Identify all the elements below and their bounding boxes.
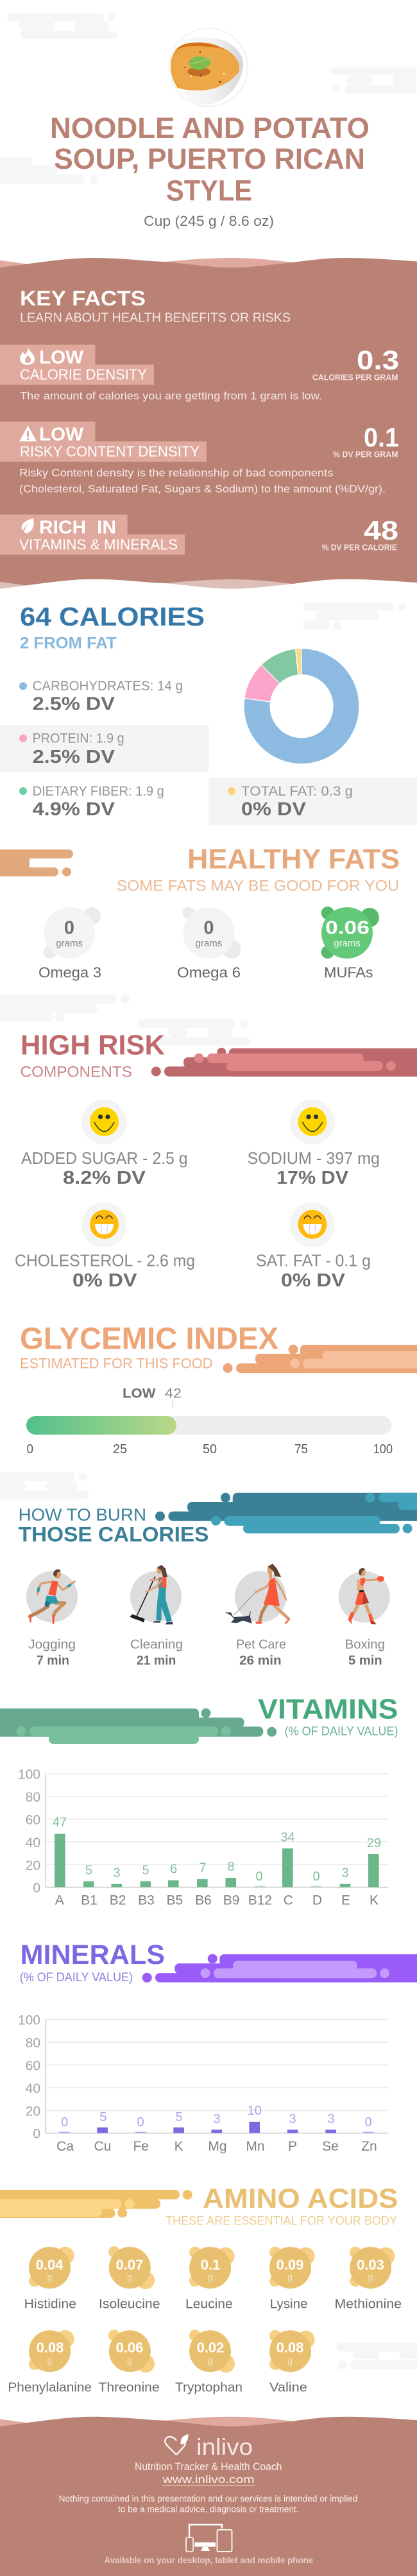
bar chart: vitamins: B12	[248, 1893, 272, 1907]
legend: total fat: TOTAL FAT: 0.3 g	[241, 784, 353, 799]
fact: calorie density	[0, 345, 399, 402]
stat: phenylalanine	[8, 2330, 92, 2394]
bar chart: vitamins: 3	[113, 1866, 121, 1880]
stat: MUFAs: grams	[334, 938, 361, 949]
stat: added sugar	[21, 1100, 188, 1188]
legend: protein: PROTEIN: 1.9 g	[33, 731, 124, 746]
decoration: red bars	[151, 1048, 417, 1077]
stat: threonine: Threonine	[98, 2380, 160, 2394]
heading: key facts: KEY FACTS	[20, 287, 146, 310]
gauge scale: 100	[373, 1442, 393, 1456]
bar chart: minerals: 40	[26, 2081, 40, 2096]
panel: healthy fats	[0, 843, 400, 980]
subheading: calories from fat: 2 FROM FAT	[20, 635, 117, 653]
gauge bar	[26, 1416, 392, 1435]
bar chart: minerals: Zn	[361, 2139, 377, 2154]
fact: rich in vitamins and minerals: % DV PER CALORIE	[322, 542, 397, 552]
website link: www.inlivo.com	[162, 2473, 255, 2486]
stat: methionine	[335, 2247, 402, 2311]
stat: MUFAs: MUFAs	[324, 964, 373, 980]
stat: sodium: SODIUM - 397 mg	[248, 1148, 380, 1168]
activity: cleaning	[130, 1565, 183, 1668]
decoration: teal bars	[155, 1493, 417, 1533]
stat: isoleucine: 0.07	[116, 2256, 143, 2273]
bar chart: vitamins: D	[312, 1893, 322, 1907]
panel: vitamins	[0, 1693, 398, 1907]
panel: high risk components	[15, 1029, 417, 1291]
legend: carbohydrates: 2.5% DV	[33, 694, 115, 715]
bar chart: vitamins: 5	[142, 1864, 149, 1878]
activity: boxing: Boxing	[345, 1637, 385, 1651]
activity: boxing: 5 min	[348, 1653, 382, 1668]
gauge scale: 25	[113, 1442, 127, 1456]
stat: lysine: g	[287, 2272, 293, 2282]
bar chart: minerals: Fe	[133, 2139, 149, 2154]
activity: jogging	[26, 1569, 78, 1668]
bar chart: minerals: 5	[99, 2110, 106, 2124]
panel: key facts	[0, 258, 417, 603]
stat: MUFAs	[321, 907, 379, 980]
stat: sodium: 17% DV	[277, 1168, 349, 1188]
bar chart: minerals: Cu	[94, 2139, 111, 2154]
bar chart: minerals: K	[174, 2139, 183, 2154]
donut chart: calorie breakdown	[244, 649, 359, 764]
stat: phenylalanine: g	[47, 2355, 52, 2366]
stat: leucine	[185, 2247, 235, 2311]
panel: minerals	[18, 1940, 417, 2154]
disclaimer: Nothing contained in this presentation and our services is intended or implied	[59, 2494, 357, 2503]
stat: lysine: Lysine	[270, 2297, 308, 2311]
stat: tryptophan	[175, 2330, 243, 2394]
bar chart: vitamins: 20	[26, 1858, 40, 1873]
bar chart: vitamins: E	[341, 1893, 350, 1907]
gauge label: 42	[165, 1386, 182, 1401]
bar chart: vitamins: 6	[170, 1862, 177, 1876]
bar chart: vitamins: 47	[53, 1816, 67, 1830]
bar chart: minerals: 5	[175, 2110, 183, 2124]
bar chart: minerals: 3	[289, 2112, 296, 2126]
gauge scale: 50	[203, 1442, 217, 1456]
bar chart: minerals: Se	[322, 2139, 339, 2154]
decoration: green bars	[0, 1708, 277, 1744]
bar chart: vitamins: 5	[85, 1864, 92, 1878]
decoration: orange bars	[0, 849, 73, 876]
stat: methionine: g	[368, 2272, 373, 2282]
gauge scale: 75	[294, 1442, 308, 1456]
bar chart: minerals: 0	[33, 2127, 40, 2142]
heading: vitamins: VITAMINS	[258, 1693, 398, 1725]
bar chart: minerals: 100	[18, 2013, 40, 2027]
hero image: soup bowl	[169, 28, 248, 107]
logo: inlivo: inlivo	[196, 2434, 253, 2460]
stat: phenylalanine: Phenylalanine	[8, 2380, 92, 2394]
bar chart: minerals: 20	[26, 2104, 40, 2119]
bar chart: minerals: P	[288, 2139, 297, 2154]
stat: histidine: g	[47, 2272, 52, 2282]
legend: dietary fiber: DIETARY FIBER: 1.9 g	[33, 784, 164, 799]
fact: calorie density: CALORIES PER GRAM	[312, 372, 398, 382]
bar chart: vitamins: B5	[166, 1893, 183, 1907]
subheading: components: COMPONENTS	[21, 1063, 132, 1080]
panel: calories	[0, 602, 417, 825]
bar chart: vitamins: 80	[26, 1790, 40, 1805]
activity: cleaning: Cleaning	[130, 1637, 183, 1651]
activity: pet care: Pet Care	[236, 1637, 286, 1651]
bar chart: minerals: 0	[364, 2115, 372, 2129]
legend: dietary fiber	[19, 784, 164, 820]
heading: healthy fats: HEALTHY FATS	[187, 843, 400, 874]
heading: minerals: MINERALS	[21, 1940, 165, 1970]
stat: saturated fat: SAT. FAT - 0.1 g	[256, 1250, 371, 1270]
bar chart: vitamins: B1	[81, 1893, 98, 1907]
stat: omega 6: Omega 6	[177, 964, 241, 980]
bar chart: vitamins: B6	[195, 1893, 212, 1907]
stat: omega 3	[38, 907, 101, 980]
stat: methionine: Methionine	[335, 2297, 402, 2311]
fact: risky content density: 0.1	[364, 422, 399, 452]
bar chart: vitamins: 29	[367, 1836, 381, 1850]
fact: rich in vitamins and minerals	[0, 515, 398, 555]
stat: omega 3: Omega 3	[38, 964, 101, 980]
panel: how to burn those calories	[19, 1493, 417, 1668]
bar chart: minerals: 0	[61, 2115, 68, 2129]
fact: calorie density: LOW	[39, 348, 84, 368]
stat: sodium	[248, 1100, 380, 1188]
stat: leucine: 0.1	[201, 2256, 220, 2273]
fact: rich in vitamins and minerals: 48	[364, 515, 398, 545]
panel: footer	[0, 2417, 417, 2576]
bar chart: vitamins: 100	[18, 1768, 40, 1782]
decoration: yellow bars	[0, 2190, 192, 2218]
stat: lysine: 0.09	[277, 2256, 303, 2273]
bar chart: vitamins: 0	[255, 1870, 263, 1884]
fact: calorie density: The amount of calories you are getting from 1 gram is low.	[20, 389, 322, 402]
title	[50, 112, 370, 207]
disclaimer: to be a medical advice, diagnosis or treatment.	[118, 2505, 299, 2514]
stat: leucine: Leucine	[185, 2297, 233, 2311]
legend: dietary fiber: 4.9% DV	[33, 799, 115, 820]
stat: added sugar: ADDED SUGAR - 2.5 g	[21, 1148, 188, 1168]
stat: cholesterol	[15, 1202, 195, 1291]
stat: histidine: 0.04	[36, 2256, 64, 2273]
activity: boxing	[339, 1568, 390, 1668]
bar chart: vitamins: 3	[341, 1866, 349, 1880]
bar chart: minerals: 3	[327, 2112, 335, 2126]
bar chart: vitamins: B9	[223, 1893, 239, 1907]
fact: risky content density: LOW	[39, 425, 84, 445]
bar chart: minerals: Mg	[208, 2139, 227, 2154]
heading: how to burn: HOW TO BURN	[19, 1505, 146, 1524]
fact: risky content density: % DV PER GRAM	[333, 449, 398, 459]
stat: isoleucine: g	[127, 2272, 132, 2282]
legend: total fat	[208, 778, 417, 825]
bar chart: vitamins: 0	[312, 1870, 320, 1884]
bar chart: minerals: 60	[26, 2058, 40, 2073]
stat: tryptophan: 0.02	[197, 2340, 224, 2356]
stat: tryptophan: g	[208, 2355, 212, 2366]
icon: flame	[20, 348, 35, 364]
subheading: key facts: LEARN ABOUT HEALTH BENEFITS OR RISKS	[20, 311, 291, 325]
heading: amino acids: AMINO ACIDS	[203, 2183, 398, 2214]
gauge scale: 0	[27, 1442, 33, 1456]
legend: protein	[0, 725, 208, 772]
bar chart: minerals: Ca	[56, 2139, 74, 2154]
stat: omega 6: grams	[196, 938, 222, 949]
activity: pet care: 26 min	[239, 1653, 282, 1668]
bar chart: vitamins	[18, 1768, 388, 1907]
bar chart: minerals: 10	[248, 2104, 262, 2118]
bar chart: vitamins: 34	[280, 1830, 295, 1845]
stat: valine: 0.08	[277, 2340, 303, 2356]
stat: threonine: 0.06	[116, 2340, 143, 2356]
gauge scale	[27, 1442, 393, 1456]
decoration: orange bars	[223, 1345, 417, 1373]
stat: isoleucine	[99, 2246, 160, 2311]
activity: jogging: 7 min	[37, 1653, 69, 1668]
title: SOUP, PUERTO RICAN	[54, 142, 365, 175]
bar chart: vitamins: 7	[199, 1861, 207, 1875]
stat: saturated fat	[256, 1202, 371, 1291]
fact: rich in vitamins and minerals: VITAMINS & MINERALS	[19, 536, 178, 553]
stat: omega 3: grams	[56, 938, 83, 949]
heading: those calories: THOSE CALORIES	[19, 1523, 208, 1546]
stat: valine	[269, 2330, 314, 2394]
heading: calories: 64 CALORIES	[20, 602, 205, 631]
legend: total fat: 0% DV	[241, 799, 307, 820]
stat: histidine	[24, 2247, 76, 2311]
fact: risky content density: (Cholesterol, Saturated Fat, Sugars & Sodium) to the amount (%DV/gr).	[19, 482, 386, 495]
legend: protein: 2.5% DV	[33, 747, 115, 767]
bar chart: minerals: 3	[213, 2112, 221, 2126]
panel: amino acids	[0, 2183, 402, 2394]
bar chart: vitamins: 0	[33, 1881, 40, 1896]
stat: threonine	[98, 2330, 160, 2394]
fact: risky content density	[0, 422, 399, 495]
panel: glycemic index	[20, 1322, 417, 1456]
stat: valine: Valine	[269, 2380, 307, 2394]
title: NOODLE AND POTATO	[50, 112, 370, 144]
stat: cholesterol: CHOLESTEROL - 2.6 mg	[15, 1250, 195, 1270]
fact: rich in vitamins and minerals: RICH IN	[39, 518, 116, 538]
bar chart: vitamins: 60	[26, 1813, 40, 1827]
stat: saturated fat: 0% DV	[281, 1270, 346, 1291]
heading: glycemic index: GLYCEMIC INDEX	[20, 1322, 278, 1356]
stat: histidine: Histidine	[24, 2297, 76, 2311]
serving size: Cup (245 g / 8.6 oz)	[144, 213, 274, 229]
stat: cholesterol: 0% DV	[72, 1270, 137, 1291]
stat: MUFAs: 0.06	[325, 918, 370, 939]
icon: leaf	[22, 518, 34, 534]
fact: calorie density: 0.3	[357, 345, 399, 375]
stat: lysine	[269, 2247, 314, 2311]
stat: tryptophan: Tryptophan	[175, 2380, 243, 2394]
logo: inlivo	[165, 2434, 253, 2460]
gauge label: LOW	[123, 1386, 156, 1401]
decoration: purple bars	[142, 1954, 417, 1983]
legend: carbohydrates: CARBOHYDRATES: 14 g	[33, 679, 183, 694]
stat: threonine: g	[127, 2355, 132, 2366]
legend: carbohydrates	[19, 679, 183, 715]
heading: high risk: HIGH RISK	[21, 1029, 165, 1061]
stat: phenylalanine: 0.08	[37, 2340, 64, 2356]
stat: added sugar: 8.2% DV	[63, 1168, 146, 1188]
icon: warning triangle	[19, 425, 37, 441]
bar chart: vitamins: 8	[227, 1860, 235, 1874]
bar chart: vitamins: B2	[110, 1893, 126, 1907]
icon: devices	[186, 2525, 232, 2552]
title: STYLE	[166, 175, 252, 207]
availability note: Available on your desktop, tablet and mobile phone	[104, 2555, 313, 2565]
bar chart: minerals: 80	[26, 2036, 40, 2051]
fact: risky content density: Risky Content density is the relationship of bad components	[19, 466, 334, 479]
bar chart: vitamins: B3	[138, 1893, 155, 1907]
activity: pet care	[225, 1564, 289, 1668]
stat: omega 3: 0	[64, 918, 74, 939]
stat: isoleucine: Isoleucine	[99, 2297, 160, 2311]
gauge label	[123, 1386, 182, 1408]
stat: omega 6	[177, 907, 241, 980]
fact: risky content density: RISKY CONTENT DENSITY	[20, 443, 200, 460]
tagline: Nutrition Tracker & Health Coach	[135, 2461, 282, 2473]
subheading: glycemic index: ESTIMATED FOR THIS FOOD	[20, 1356, 213, 1372]
stat: valine: g	[287, 2355, 293, 2366]
bar chart: vitamins: K	[370, 1893, 379, 1907]
bar chart: vitamins: 40	[26, 1836, 40, 1850]
bar chart: minerals: 0	[137, 2115, 144, 2129]
stat: omega 6: 0	[203, 918, 214, 939]
stat: leucine: g	[208, 2272, 212, 2282]
subheading: amino acids: THESE ARE ESSENTIAL FOR YOUR BODY	[166, 2213, 397, 2228]
activity: jogging: Jogging	[28, 1637, 76, 1651]
subheading: healthy fats: SOME FATS MAY BE GOOD FOR YOU	[117, 877, 399, 894]
activity: cleaning: 21 min	[137, 1653, 176, 1668]
stat: methionine: 0.03	[357, 2256, 384, 2273]
fact: calorie density: CALORIE DENSITY	[20, 366, 147, 383]
bar chart: minerals	[18, 2013, 388, 2154]
bar chart: vitamins: C	[284, 1893, 293, 1907]
subheading: percent of daily value: (% OF DAILY VALUE)	[20, 1971, 133, 1984]
disclaimer	[59, 2494, 357, 2514]
bar chart: minerals: Mn	[246, 2139, 265, 2154]
bar chart: vitamins: A	[55, 1893, 64, 1907]
subheading: percent of daily value: (% OF DAILY VALUE)	[285, 1725, 398, 1738]
